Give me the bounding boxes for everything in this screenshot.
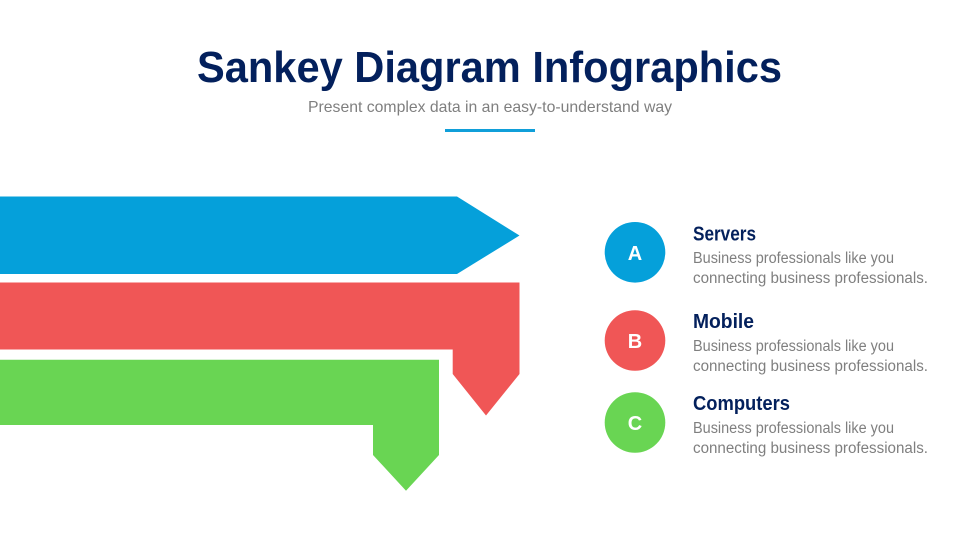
badge A: A [628,243,642,265]
description C: Business professionals like you [693,420,894,437]
legend item A: Servers [605,222,928,287]
sankey diagram [0,196,520,491]
heading: Mobile: Mobile [693,311,754,333]
arrow: blue flow [0,196,520,274]
arrow: red flow [0,282,520,416]
heading: Servers: Servers [693,224,756,246]
title: Sankey Diagram Infographics [197,43,782,92]
badge A [605,222,665,283]
arrow: green flow [0,360,439,491]
header [197,43,782,132]
heading: Computers: Computers [693,393,790,415]
description A: Business professionals like you [693,250,894,267]
badge B: B [628,331,642,353]
description C: connecting business professionals. [693,440,928,457]
description A: connecting business professionals. [693,270,928,287]
description B: connecting business professionals. [693,358,928,375]
title underline [445,129,535,132]
legend item C: Computers [605,392,928,457]
description C [693,420,928,457]
badge C: C [628,413,642,435]
legend item B: Mobile [605,310,928,375]
badge B [605,310,665,371]
subtitle: Present complex data in an easy-to-understand way [308,99,672,116]
description A [693,250,928,287]
description B: Business professionals like you [693,338,894,355]
description B [693,338,928,375]
badge C [605,392,665,453]
